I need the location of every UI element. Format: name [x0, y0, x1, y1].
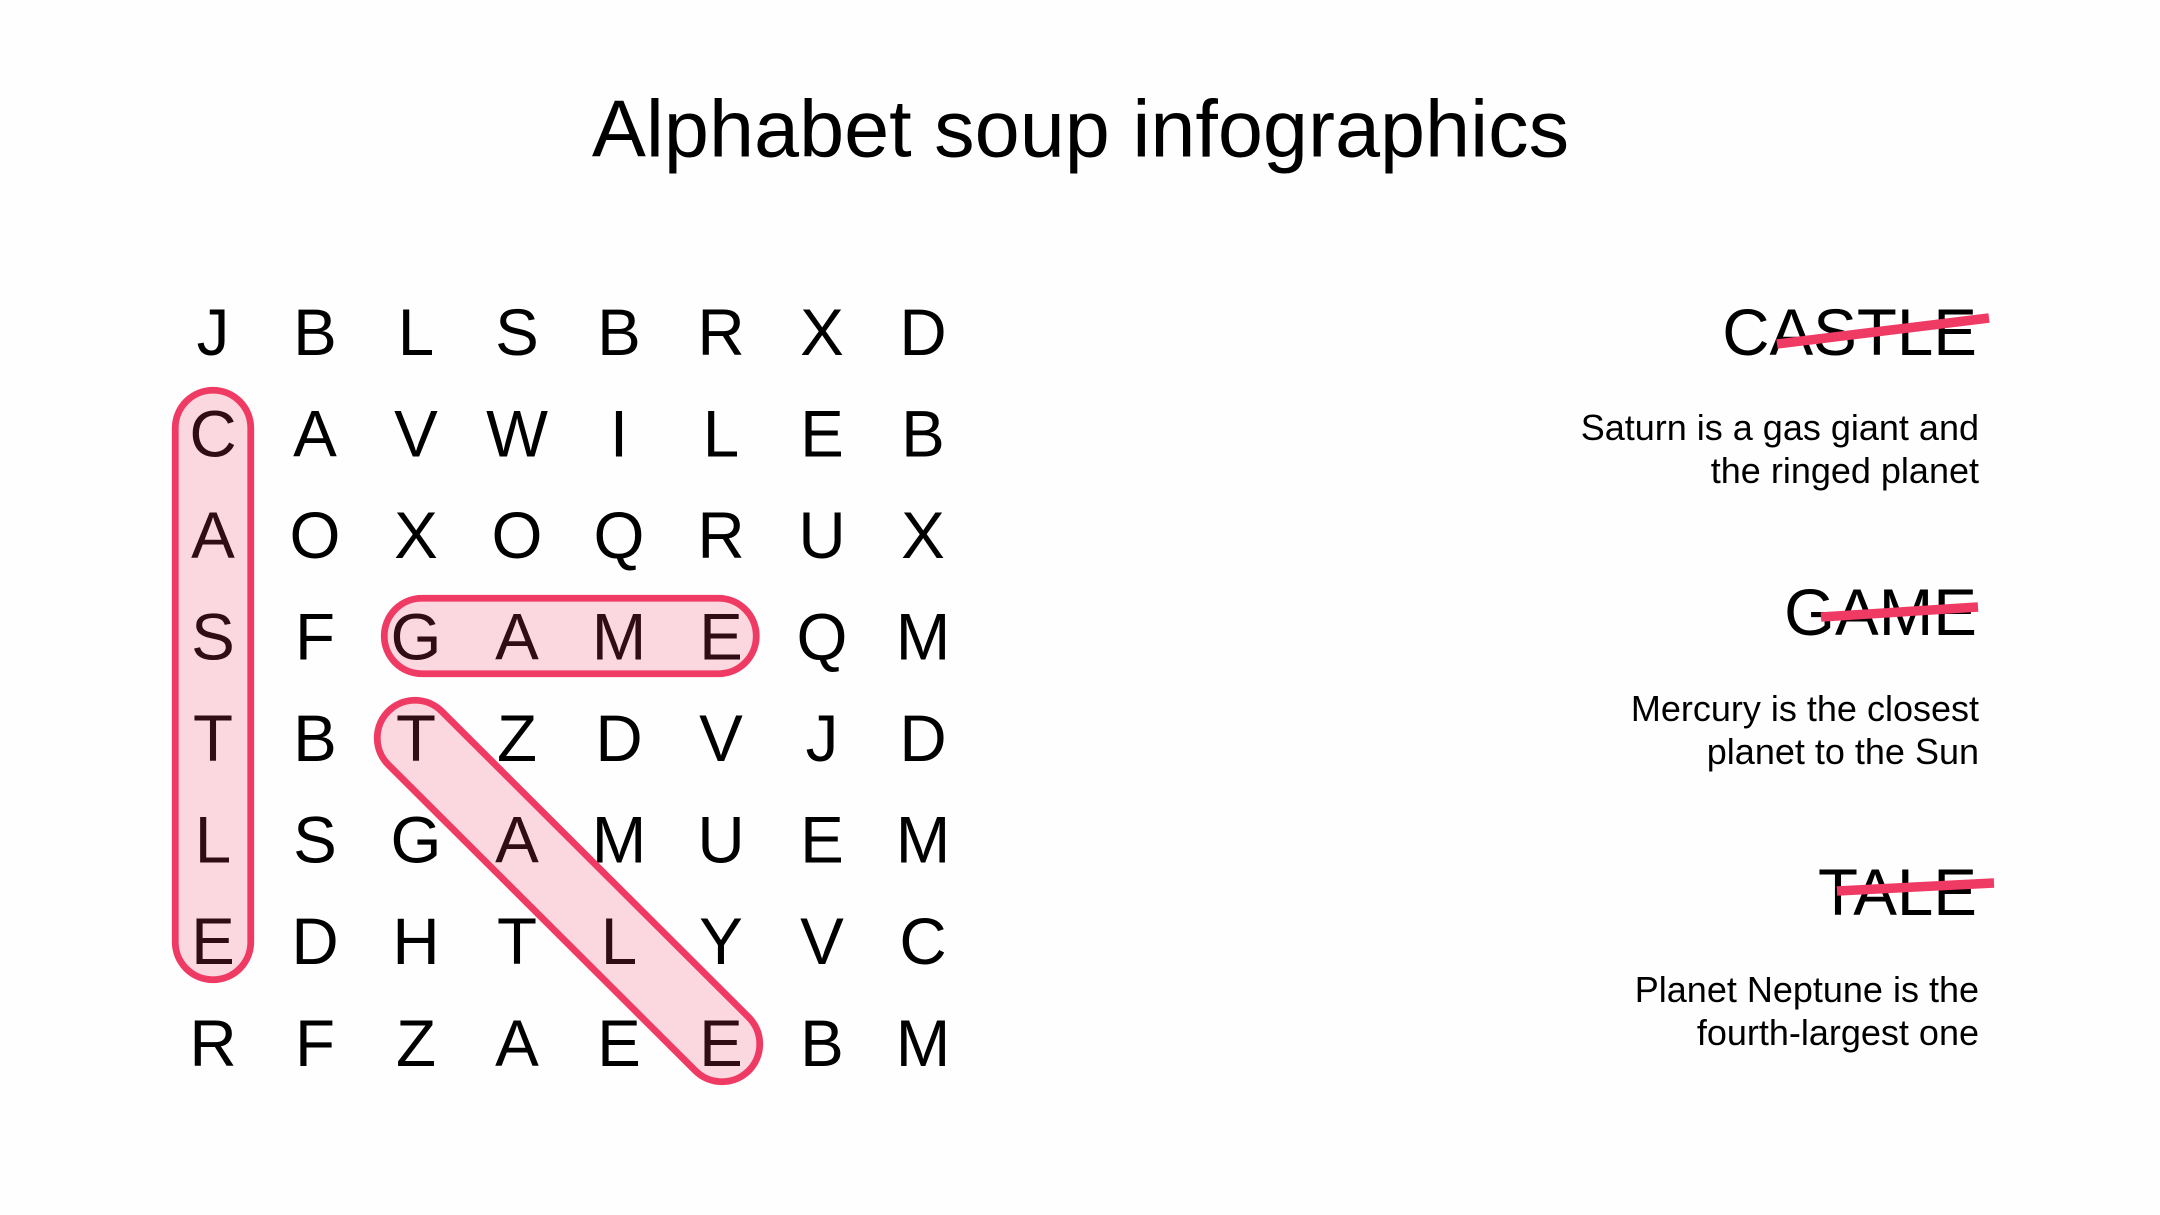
row 6: S	[293, 804, 337, 876]
letter grid	[189, 296, 950, 1080]
row 3: R	[697, 499, 745, 572]
row 6: M	[896, 804, 950, 876]
row 7: Y	[699, 905, 743, 978]
row 4: G	[391, 600, 441, 674]
highlight: TALE	[377, 700, 760, 1082]
row 7: H	[392, 905, 440, 978]
row 5: B	[293, 702, 337, 775]
row 7: L	[601, 905, 637, 978]
row 5: Z	[497, 702, 537, 775]
row 7: E	[191, 905, 235, 978]
row 7: V	[800, 905, 844, 978]
row 6: G	[391, 804, 441, 876]
row 2	[189, 398, 945, 470]
row 4: E	[699, 600, 743, 674]
row 1: B	[293, 296, 337, 369]
row 2: I	[610, 398, 628, 470]
row 1: D	[899, 296, 947, 369]
row 4: A	[495, 600, 539, 674]
row 8: R	[189, 1007, 237, 1080]
row 3: X	[901, 499, 945, 572]
row 3: Q	[594, 499, 644, 572]
row 2: A	[293, 398, 337, 470]
row 5: T	[396, 702, 436, 775]
description: TALE	[1635, 969, 1979, 1053]
row 8: M	[896, 1007, 950, 1080]
row 3: A	[191, 499, 235, 572]
row 2: W	[486, 398, 548, 470]
row 8: E	[597, 1007, 641, 1080]
strike: TALE	[1837, 883, 1994, 891]
description: CASTLE: the ringed planet	[1711, 450, 1979, 491]
row 3: O	[290, 499, 340, 572]
row 8: F	[295, 1007, 335, 1080]
description: GAME: Mercury is the closest	[1631, 688, 1979, 729]
row 7: C	[899, 905, 947, 978]
word: GAME: GAME	[1784, 576, 1977, 649]
row 4: M	[592, 600, 646, 674]
highlight: CASTLE	[175, 390, 251, 980]
row 7: D	[291, 905, 339, 978]
row 2: B	[901, 398, 945, 470]
row 1: B	[597, 296, 641, 369]
row 6: U	[697, 804, 745, 876]
description: GAME	[1631, 688, 1979, 772]
row 5	[193, 702, 947, 775]
description: CASTLE	[1581, 407, 1979, 491]
row 4: Q	[797, 600, 847, 674]
row 6: L	[195, 804, 231, 876]
row 2: V	[394, 398, 438, 470]
title: Alphabet soup infographics	[592, 84, 1569, 174]
row 7: T	[497, 905, 537, 978]
row 5: D	[899, 702, 947, 775]
row 5: T	[193, 702, 233, 775]
row 8: A	[495, 1007, 539, 1080]
row 8: Z	[396, 1007, 436, 1080]
row 4: M	[896, 600, 950, 674]
word: TALE: TALE	[1818, 856, 1977, 929]
row 4: F	[295, 600, 335, 674]
row 8: E	[699, 1007, 743, 1080]
row 1: R	[697, 296, 745, 369]
word entry: CASTLE	[1581, 296, 1989, 491]
row 7	[191, 905, 947, 978]
row 2: C	[189, 398, 237, 470]
row 6	[195, 804, 950, 876]
description: CASTLE: Saturn is a gas giant and	[1581, 407, 1979, 448]
row 5: J	[806, 702, 838, 775]
row 8: B	[800, 1007, 844, 1080]
description: GAME: planet to the Sun	[1707, 731, 1979, 772]
description: TALE: fourth-largest one	[1697, 1012, 1979, 1053]
row 2: E	[800, 398, 844, 470]
row 6: M	[592, 804, 646, 876]
row 3: O	[492, 499, 542, 572]
row 1	[197, 296, 947, 369]
row 3: U	[798, 499, 846, 572]
row 1: X	[800, 296, 844, 369]
row 1: S	[495, 296, 539, 369]
row 8	[189, 1007, 950, 1080]
row 1: L	[398, 296, 434, 369]
highlight: GAME	[384, 598, 756, 674]
word: CASTLE: CASTLE	[1722, 296, 1977, 369]
row 4	[191, 600, 950, 674]
word entry: TALE	[1635, 856, 1994, 1053]
row 5: V	[699, 702, 743, 775]
word entry: GAME	[1631, 576, 1979, 772]
row 4: S	[191, 600, 235, 674]
row 1: J	[197, 296, 229, 369]
strike: CASTLE	[1777, 318, 1989, 344]
strike: GAME	[1821, 607, 1978, 617]
row 5: D	[595, 702, 643, 775]
description: TALE: Planet Neptune is the	[1635, 969, 1979, 1010]
row 6: E	[800, 804, 844, 876]
row 3: X	[394, 499, 438, 572]
row 3	[191, 499, 945, 572]
row 2: L	[703, 398, 739, 470]
row 6: A	[495, 804, 539, 876]
